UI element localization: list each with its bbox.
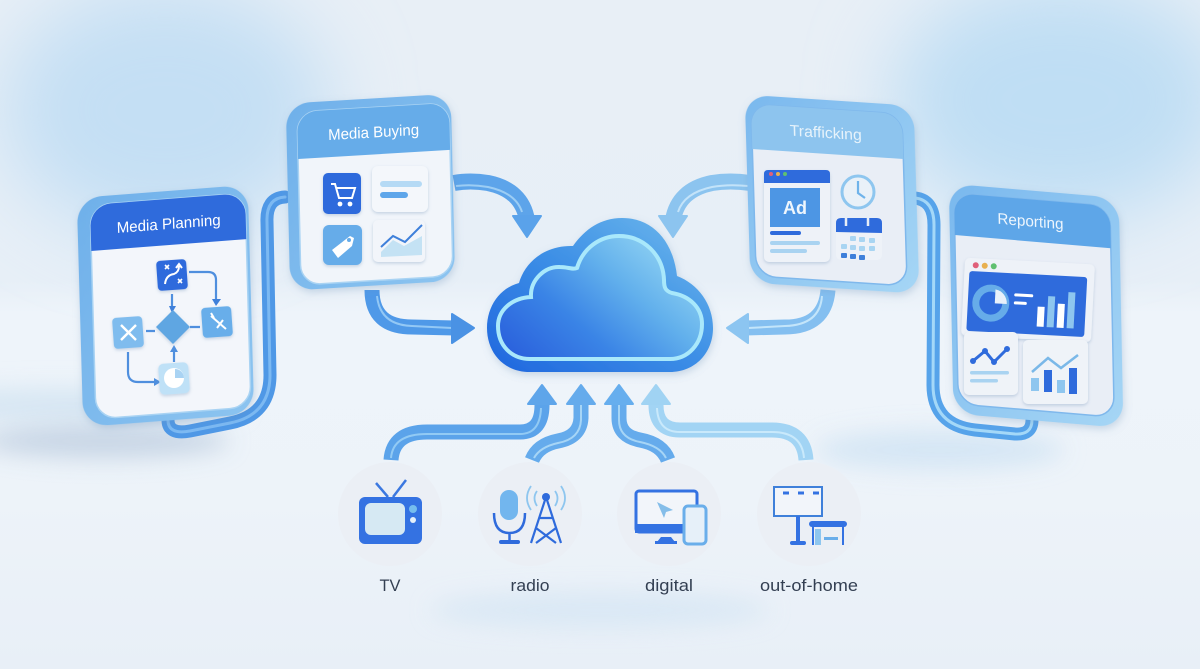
label: TV: TV: [380, 576, 401, 595]
source: out-of-home: [757, 462, 861, 595]
icon: text lines card: [372, 166, 428, 212]
panel: Media Buying: [286, 94, 455, 291]
arrow: Media Buying to cloud (upper): [454, 182, 541, 237]
heading: Media Planning: Media Planning: [116, 212, 221, 237]
dashboard window: [961, 258, 1095, 342]
arrow: Media Buying to cloud (lower): [372, 290, 474, 343]
arrow: Trafficking to cloud (lower): [727, 290, 828, 343]
source: TV: [338, 462, 442, 595]
label: digital: digital: [645, 576, 693, 595]
icon: price tag: [323, 225, 362, 265]
connector pipe: Media Planning to Media Buying: [168, 197, 285, 432]
source: radio: [478, 462, 582, 595]
icon: calendar: [836, 215, 882, 260]
cloud: [487, 218, 713, 372]
panel: Trafficking: [745, 95, 919, 294]
arrow: radio to cloud: [532, 385, 595, 460]
heading: Trafficking: Trafficking: [789, 123, 862, 144]
arrow: Trafficking to cloud (upper): [659, 182, 750, 237]
label: out-of-home: out-of-home: [760, 576, 858, 595]
heading: Media Buying: Media Buying: [328, 122, 419, 144]
panel: Media Planning: [77, 185, 254, 427]
icon: area chart card: [373, 220, 425, 262]
panel: Reporting: [949, 184, 1123, 428]
icon: ad window: [764, 170, 830, 262]
arrow: out-of-home to cloud: [642, 385, 806, 460]
bar chart card: [1023, 340, 1088, 404]
connector pipe: Trafficking to Reporting: [915, 198, 1032, 434]
arrow: digital to cloud: [605, 385, 668, 460]
arrow: TV to cloud: [391, 385, 556, 460]
icon: ad window: Ad: [783, 198, 807, 218]
heading: Reporting: Reporting: [997, 211, 1064, 233]
flow diagram: [112, 259, 233, 395]
label: radio: radio: [510, 576, 550, 595]
icon: shopping cart: [323, 173, 361, 214]
icon: clock: [842, 176, 874, 208]
source: digital: [617, 462, 721, 595]
trend line card: [964, 332, 1018, 395]
